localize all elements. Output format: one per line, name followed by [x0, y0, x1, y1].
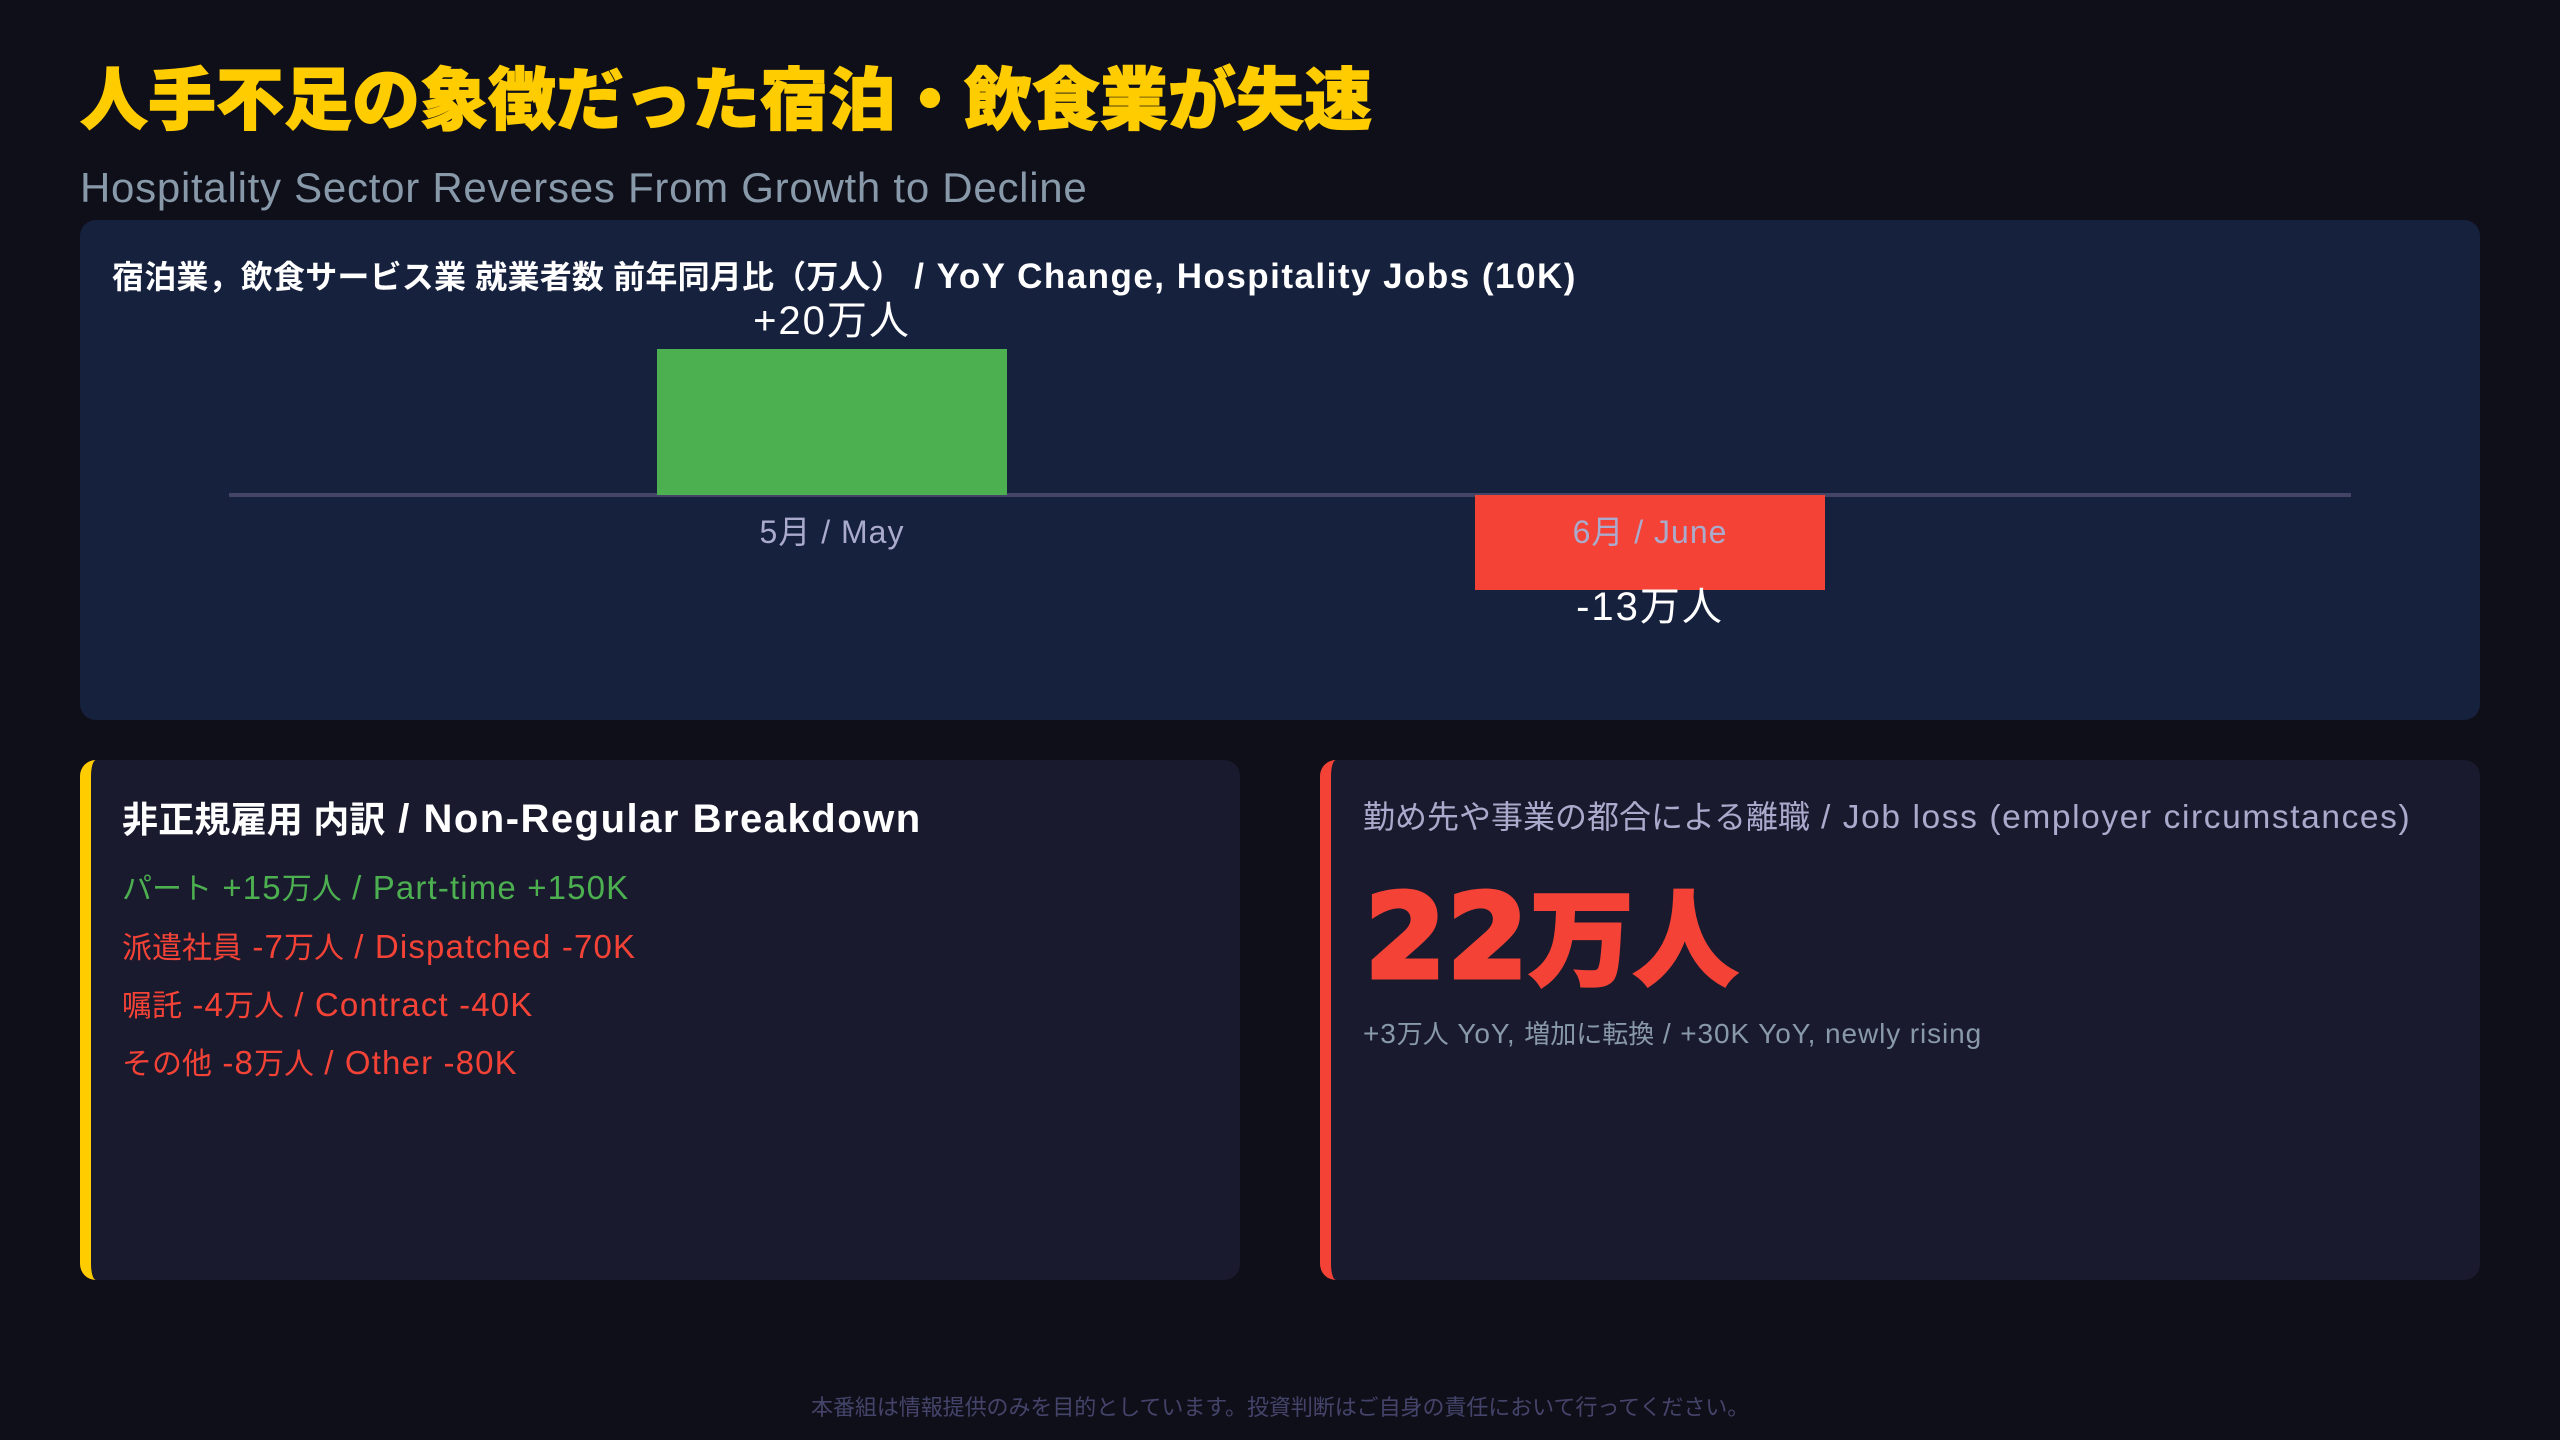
panel: year-on-year hospitality jobs chart — [80, 220, 2480, 720]
zero axis — [229, 493, 2351, 497]
subtitle: Hospitality Sector Reverses From Growth to Decline — [80, 164, 1087, 211]
item: part-time: パート +15万人 / Part-time +150K — [122, 869, 629, 906]
title: 人手不足の象徴だった宿泊・飲食業が失速 — [80, 63, 1372, 139]
chart heading: 宿泊業，飲食サービス業 就業者数 前年同月比（万人） / YoY Change, Hospitality Jobs (10K) — [112, 257, 1577, 296]
item: dispatched: 派遣社員 -7万人 / Dispatched -70K — [122, 928, 636, 965]
category label: June: 6月 / June — [1573, 514, 1727, 550]
bar: June -13 — [1475, 495, 1825, 590]
item: contract: 嘱託 -4万人 / Contract -40K — [122, 986, 533, 1023]
stat note: +3万人 YoY, 増加に転換 / +30K YoY, newly rising — [1363, 1018, 1982, 1049]
value label: May: +20万人 — [753, 299, 911, 343]
value label: June: -13万人 — [1576, 585, 1724, 629]
category label: May: 5月 / May — [760, 514, 904, 550]
bar: May +20 — [657, 349, 1007, 495]
panel: job loss from employer circumstances — [1320, 760, 2480, 1280]
footer disclaimer: 本番組は情報提供のみを目的としています。投資判断はご自身の責任において行ってください。 — [811, 1395, 1749, 1420]
panel: non-regular breakdown — [80, 760, 1240, 1280]
stat label: 勤め先や事業の都合による離職 / Job loss (employer circumstances) — [1363, 799, 2411, 836]
item: other: その他 -8万人 / Other -80K — [122, 1044, 518, 1081]
panel heading: 非正規雇用 内訳 / Non-Regular Breakdown — [122, 797, 922, 841]
big number: 22万人 — [1365, 870, 1737, 1005]
